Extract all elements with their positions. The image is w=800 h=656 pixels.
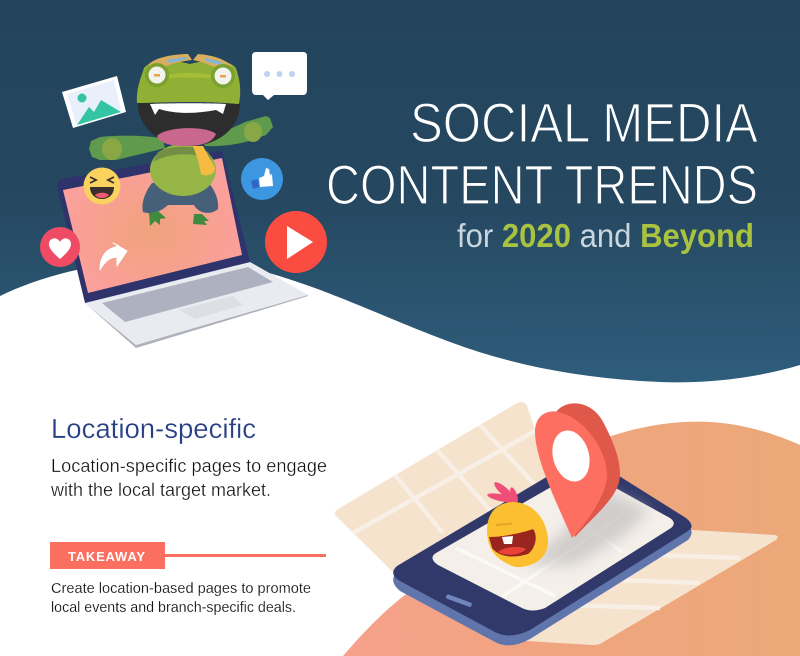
section description: Location-specific pages to engage xyxy=(51,456,327,476)
eyes xyxy=(145,63,169,87)
phone screen xyxy=(432,472,674,610)
subtitle: for 2020 and Beyond xyxy=(457,217,754,254)
feet xyxy=(149,211,166,226)
header background with wave xyxy=(0,0,800,382)
icon: share arrow xyxy=(100,243,127,270)
section description xyxy=(50,456,327,500)
takeaway text xyxy=(51,581,311,616)
head xyxy=(137,61,240,104)
orange blob xyxy=(343,422,800,656)
body xyxy=(150,144,216,196)
laptop base xyxy=(85,294,308,348)
arms xyxy=(89,136,165,160)
icon: picture xyxy=(62,76,126,128)
takeaway text: Create location-based pages to promote xyxy=(51,581,311,597)
trackpad xyxy=(179,296,243,319)
icon: play button xyxy=(265,211,327,273)
teeth xyxy=(150,103,226,115)
icon: thumbs up xyxy=(241,158,283,200)
takeaway text: local events and branch-specific deals. xyxy=(51,600,296,616)
icon: laughing emoji xyxy=(84,168,120,204)
map pin xyxy=(535,403,620,538)
takeaway label: TAKEAWAY xyxy=(68,549,145,564)
icon: heart xyxy=(40,227,80,267)
chick mascot xyxy=(487,480,548,567)
necktie xyxy=(193,146,215,175)
laptop illustration xyxy=(57,151,308,348)
goggles xyxy=(148,54,192,70)
laptop screen xyxy=(57,151,250,303)
phone xyxy=(393,460,692,645)
section heading: Location-specific xyxy=(51,413,256,444)
trousers xyxy=(142,182,218,213)
title xyxy=(326,91,759,216)
tongue xyxy=(157,128,216,146)
section description: with the local target market. xyxy=(50,480,271,500)
takeaway label xyxy=(50,542,326,569)
frog mascot xyxy=(89,54,273,226)
icon: speech bubble xyxy=(252,52,307,100)
keyboard xyxy=(102,267,273,322)
map illustration xyxy=(335,402,778,645)
mouth xyxy=(138,103,240,146)
title: SOCIAL MEDIA xyxy=(410,91,759,154)
